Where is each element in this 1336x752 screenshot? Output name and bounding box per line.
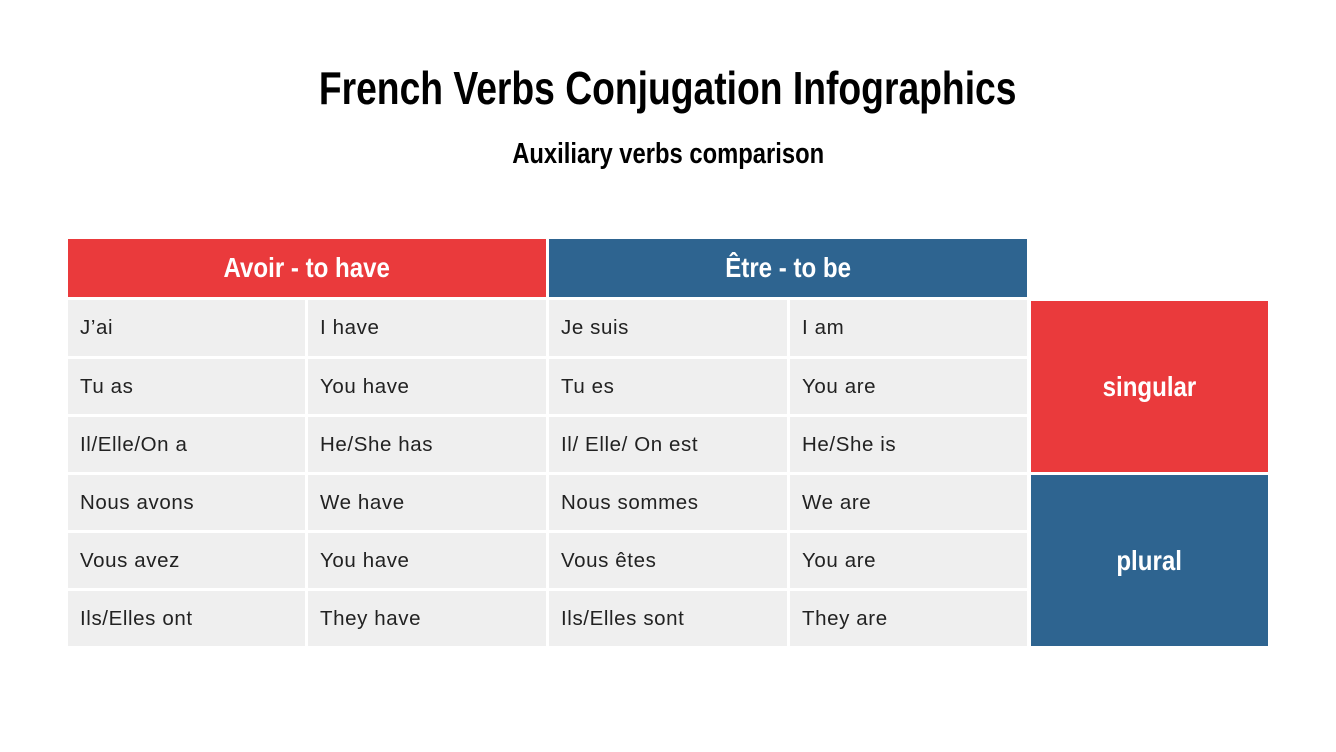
table: Ils/Elles sont <box>561 606 684 630</box>
label: plural <box>1031 475 1268 646</box>
table: They are <box>802 606 888 630</box>
table: Vous avez <box>80 548 180 572</box>
table: You have <box>320 548 410 572</box>
table: You are <box>802 548 876 572</box>
table: Tu as <box>80 374 134 398</box>
table: J’ai <box>80 316 113 339</box>
header: avoir: Avoir - to have <box>224 252 390 283</box>
table <box>68 300 1027 646</box>
table: Il/ Elle/ On est <box>561 432 698 456</box>
table: Tu es <box>561 374 615 398</box>
label: singular <box>1031 301 1268 472</box>
table: I have <box>320 316 379 339</box>
table: Nous avons <box>80 490 194 514</box>
table: He/She is <box>802 432 896 456</box>
label: singular: singular <box>1103 370 1196 402</box>
table: Nous sommes <box>561 490 699 514</box>
title: French Verbs Conjugation Infographics <box>319 62 1017 114</box>
header: etre: Être - to be <box>725 252 851 283</box>
label: plural: plural <box>1117 544 1182 576</box>
table: We are <box>802 490 871 514</box>
table: Il/Elle/On a <box>80 432 187 456</box>
table: You are <box>802 374 876 398</box>
header: etre <box>549 239 1027 297</box>
subtitle: Auxiliary verbs comparison <box>512 138 824 170</box>
table: We have <box>320 490 405 514</box>
header: avoir <box>68 239 546 297</box>
table: Je suis <box>561 316 629 339</box>
table: I am <box>802 316 844 339</box>
table: He/She has <box>320 432 433 456</box>
table: Ils/Elles ont <box>80 606 193 630</box>
table: You have <box>320 374 410 398</box>
table: They have <box>320 606 421 630</box>
table: Vous êtes <box>561 548 656 572</box>
